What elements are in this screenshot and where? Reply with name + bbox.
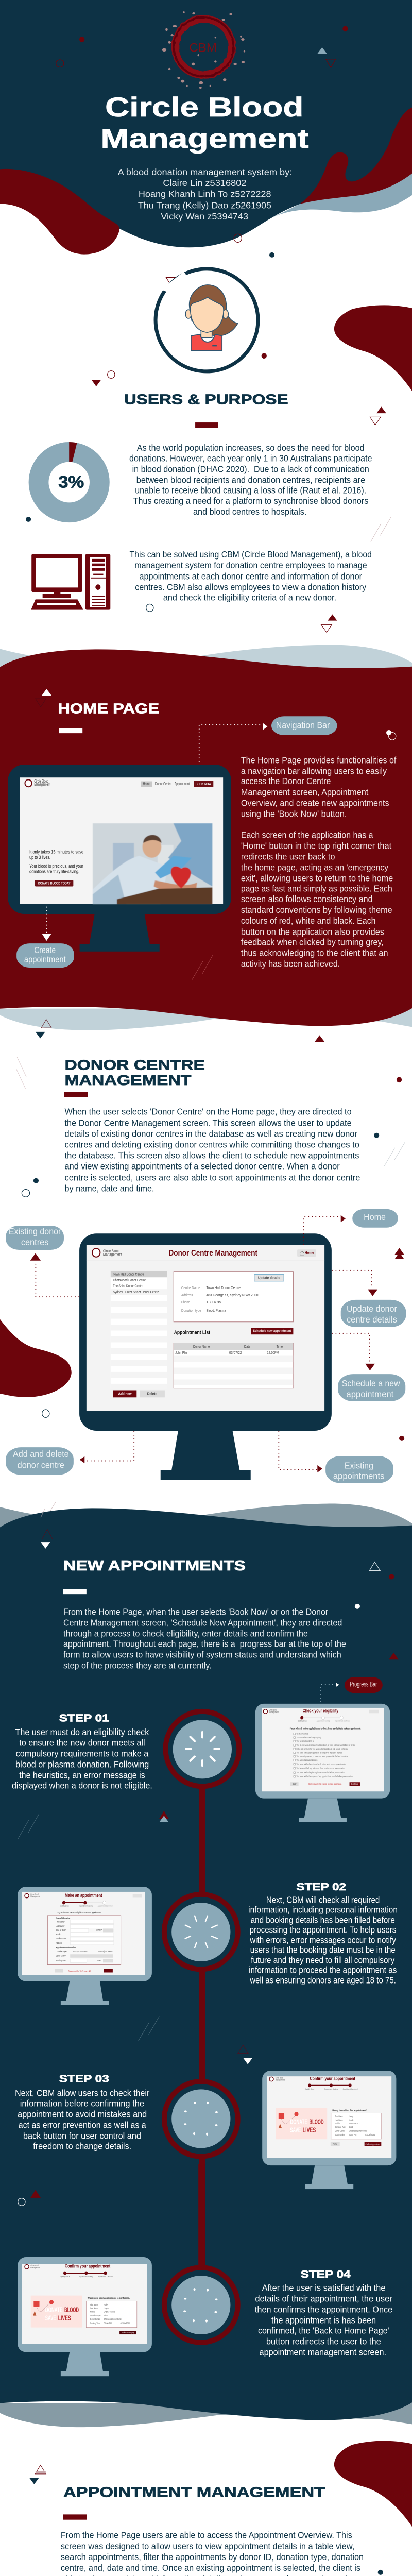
step 01: The user must do an eligibility check bbox=[15, 1727, 149, 1737]
image: donate blood banner: SAVE bbox=[290, 2126, 301, 2134]
callout: create appointment bbox=[16, 907, 74, 968]
details box: Centre Name bbox=[181, 1285, 200, 1290]
step 01: blood or plasma donation. Following bbox=[15, 1759, 149, 1770]
monitor: appointment confirmed: Circle Blood bbox=[30, 2265, 39, 2267]
monitor: check your eligibility: Check your eligibility bbox=[303, 1708, 338, 1714]
callout: home bbox=[304, 1209, 398, 1244]
logo: blood ring: CBM bbox=[189, 41, 217, 55]
details box: 13 14 95 bbox=[207, 1300, 221, 1304]
heading: donor centre management bbox=[65, 1057, 205, 1088]
details box: Update details bbox=[258, 1276, 280, 1280]
text: donor centre description: by name, date and time. bbox=[65, 1183, 154, 1194]
authors: A blood donation management system by: bbox=[118, 167, 292, 177]
callout: progress bar: Progress Bar bbox=[350, 1681, 377, 1688]
details box: 483 George St, Sydney NSW 2000 bbox=[207, 1293, 259, 1297]
monitor: donor centre screen bbox=[0, 1233, 404, 1480]
monitor: confirm your appointment: First Name bbox=[335, 2115, 343, 2118]
step 01: to ensure the new donor meets all bbox=[19, 1738, 145, 1748]
monitor: make an appointment: Donation Type* bbox=[56, 1951, 67, 1953]
monitor: confirm your appointment: Mobile bbox=[335, 2123, 340, 2125]
monitor: home page screen: Management bbox=[34, 782, 50, 787]
callout: navigation bar bbox=[199, 716, 337, 776]
monitor: appointment confirmed: Thank you! Your appointment is confirmed. bbox=[88, 2297, 130, 2300]
monitor: appointment confirmed: Donation Type bbox=[90, 2314, 100, 2317]
text: home page description bbox=[241, 755, 396, 969]
image: donate blood banner: DONATE bbox=[290, 2117, 307, 2126]
callout: add and delete donor centre bbox=[6, 1432, 134, 1475]
appointment table: 03/07/22 bbox=[229, 1351, 242, 1355]
timeline node: step 03 bbox=[164, 2081, 238, 2157]
text: need for donation: and blood centres to hospitals. bbox=[193, 507, 306, 517]
authors bbox=[118, 167, 292, 222]
monitor: home page screen: Donor Centre bbox=[155, 782, 171, 787]
panel: header bbox=[0, 0, 412, 285]
monitor: check your eligibility: Clear bbox=[293, 1783, 297, 1786]
timeline node: step 04 bbox=[164, 2164, 238, 2343]
monitor: check your eligibility: Management bbox=[269, 1711, 279, 1714]
monitor: confirm your appointment: Circle Blood bbox=[276, 2077, 283, 2079]
callout: existing appointments bbox=[279, 1432, 393, 1483]
icon: user portrait bbox=[156, 269, 258, 371]
monitor: home page screen: Appointment bbox=[175, 782, 190, 787]
monitor: make an appointment: Mobile * bbox=[56, 1933, 62, 1936]
monitor: check your eligibility: Continue bbox=[351, 1783, 358, 1786]
text: CBM solution: and check the eligibility criteria of a new donor. bbox=[163, 592, 336, 603]
image: donate blood banner: BLOOD bbox=[64, 2306, 79, 2314]
monitor: check your eligibility bbox=[255, 1704, 390, 1822]
monitor: donor centre screen: Management bbox=[103, 1252, 122, 1257]
step 03: freedom to change details. bbox=[33, 2141, 131, 2151]
monitor: confirm your appointment: 02/08/2022 bbox=[365, 2134, 375, 2137]
monitor: make an appointment: Plasma (1.5 hours) bbox=[98, 1951, 112, 1953]
text: donor centre description bbox=[65, 1107, 360, 1194]
monitor: appointment confirmed: Appointment Confirmed bbox=[98, 2275, 113, 2278]
step 04 bbox=[255, 2268, 392, 2358]
decorations bbox=[26, 353, 391, 612]
callout: update donor centre details bbox=[332, 1270, 406, 1327]
monitor: appointment confirmed: Management bbox=[30, 2266, 40, 2269]
monitor: appointment confirmed: 0456348242 bbox=[104, 2311, 115, 2313]
logo: blood ring bbox=[162, 11, 245, 89]
title: Management bbox=[100, 124, 308, 154]
step 03: appointment to avoid mistakes and bbox=[18, 2109, 147, 2120]
monitor: check your eligibility: Circle Blood bbox=[269, 1709, 277, 1711]
monitor: home page screen: Home bbox=[143, 782, 150, 787]
image: donate blood banner: LIVES bbox=[58, 2314, 71, 2323]
monitor: confirm your appointment: Last Name bbox=[335, 2119, 343, 2122]
monitor: appointment confirmed: Blood bbox=[104, 2314, 108, 2317]
panel: appointment management bbox=[22, 2441, 412, 2576]
authors: Thu Trang (Kelly) Dao z5261905 bbox=[138, 200, 271, 211]
callout: existing donor centres: Existing donor bbox=[9, 1227, 61, 1236]
appointment table: Date bbox=[244, 1345, 251, 1349]
monitor: appointment confirmed: Booking Time bbox=[90, 2322, 100, 2325]
text: CBM solution bbox=[130, 550, 372, 603]
monitor: home page screen: DONATE BLOOD TODAY bbox=[38, 880, 71, 885]
monitor: confirm your appointment: 0456348242 bbox=[349, 2123, 359, 2125]
step 01: compulsory requirements to make a bbox=[16, 1749, 148, 1759]
monitor: donor centre screen: Delete bbox=[147, 1392, 157, 1396]
chart: 3 percent donut: 3% bbox=[58, 473, 84, 492]
authors: Hoang Khanh Linh To z5272228 bbox=[139, 189, 271, 199]
monitor: appointment confirmed: First Name bbox=[90, 2303, 98, 2306]
monitor: check your eligibility: You weigh at least 50 kg bbox=[297, 1740, 314, 1743]
monitor: check your eligibility: You have not had an operation or surgery in the last 6 months bbox=[297, 1752, 342, 1754]
callout: create appointment: appointment bbox=[24, 955, 66, 964]
monitor: donor centre screen: Schedule new appointment bbox=[253, 1329, 291, 1333]
list of donor centres: Sydney Hunter Street Donor Centre bbox=[113, 1290, 159, 1294]
details box: Town Hall Donor Centre bbox=[207, 1285, 241, 1290]
monitor: make an appointment: Time* bbox=[97, 1960, 101, 1962]
callout: navigation bar: Navigation Bar bbox=[276, 720, 330, 731]
monitor: appointment confirmed: Last Name bbox=[90, 2307, 98, 2310]
monitor: donor centre screen: Circle Blood bbox=[103, 1249, 119, 1253]
monitor: make an appointment: Address bbox=[56, 1942, 62, 1945]
callout: existing appointments: appointments bbox=[333, 1471, 384, 1481]
monitor: make an appointment: Donor Centre* bbox=[56, 1955, 66, 1957]
monitor: confirm your appointment: Booking Time bbox=[335, 2134, 345, 2137]
appointment table: Time bbox=[277, 1345, 283, 1349]
callout: add and delete donor centre: Add and delete bbox=[13, 1449, 69, 1459]
monitor: confirm your appointment: Donation Type bbox=[335, 2126, 346, 2129]
image: donate blood banner: BLOOD bbox=[310, 2117, 324, 2126]
monitor: confirm your appointment: Blood bbox=[349, 2126, 353, 2129]
monitor: make an appointment bbox=[18, 1887, 152, 2005]
image: donor photo bbox=[93, 823, 212, 904]
heading: donor centre management: DONOR CENTRE bbox=[65, 1057, 205, 1073]
appointment table: 12:00PM bbox=[267, 1351, 279, 1355]
monitor: appointment confirmed: Confirm your appointment bbox=[65, 2264, 111, 2269]
monitor: home page screen: donations are truly life-saving. bbox=[29, 869, 79, 874]
panel: home page bbox=[0, 645, 412, 1030]
monitor: check your eligibility: In the last 12 months, you have not engaged in at-risk sexual behaviour bbox=[297, 1748, 348, 1751]
monitor: home page screen: It only takes 15 minutes to save bbox=[29, 850, 83, 855]
monitor: make an appointment: Gender* bbox=[96, 1929, 102, 1931]
panel: new appointments background bbox=[0, 1502, 412, 2427]
monitor: make an appointment: Personal Information bbox=[56, 1917, 70, 1920]
list of donor centres bbox=[111, 1271, 167, 1388]
monitor: make an appointment: Date of Birth* bbox=[56, 1929, 66, 1932]
monitor: confirm your appointment: Eligibility Check bbox=[305, 2088, 315, 2090]
monitor: home page screen bbox=[8, 765, 231, 952]
monitor: check your eligibility: You are 18-75 years old bbox=[297, 1733, 308, 1735]
panel: donor centre management bbox=[16, 1020, 405, 1197]
decorations bbox=[56, 26, 348, 285]
monitor: check your eligibility: You are not taking antibiotics bbox=[297, 1759, 317, 1762]
icon: desktop computer bbox=[31, 554, 110, 610]
monitor: check your eligibility: Appointment Booking bbox=[317, 1720, 330, 1722]
details box: Donation type bbox=[181, 1308, 201, 1313]
monitor: check your eligibility: You do not have a serious heart condition, or have not had heart attack or stroke bbox=[297, 1744, 355, 1747]
monitor: confirm your appointment: Appointment Confirmed bbox=[343, 2088, 358, 2090]
authors: Vicky Wan z5394743 bbox=[161, 212, 248, 222]
panel: step 02 and 03 bbox=[15, 1881, 398, 2189]
step 01: STEP 01 bbox=[59, 1713, 109, 1724]
title: Circle Blood bbox=[105, 92, 303, 123]
heading: home page: HOME PAGE bbox=[58, 700, 159, 716]
details box: Blood, Plasma bbox=[207, 1308, 226, 1313]
timeline bbox=[165, 1711, 239, 2267]
step 03 bbox=[15, 2073, 149, 2151]
text: appointment overview description bbox=[61, 2530, 365, 2576]
monitor: appointment confirmed: 02/08/2022 bbox=[121, 2322, 130, 2325]
text: home page description: using the 'Book Now' button. bbox=[241, 809, 347, 819]
callout: create appointment: Create bbox=[34, 945, 56, 955]
monitor: check your eligibility: You have not had any tattoos in the 4 months before your donation bbox=[297, 1767, 345, 1770]
text: home page description: access the Donor Centre bbox=[241, 776, 331, 786]
monitor: make an appointment: Donor must be 18-75 years old bbox=[68, 1970, 91, 1973]
monitor: check your eligibility: You have not had a piercing in the 4 months before your donation bbox=[297, 1772, 345, 1774]
text: new appointments intro bbox=[63, 1607, 346, 1671]
appointment table: John Phe bbox=[175, 1351, 187, 1355]
heading: users and purpose: USERS & PURPOSE bbox=[124, 391, 288, 407]
monitor: confirm your appointment: Confirm Appointment bbox=[366, 2143, 381, 2146]
monitor: make an appointment: Appointment Booking bbox=[79, 1905, 93, 1907]
image: donate blood banner: DONATE bbox=[45, 2306, 62, 2314]
text: need for donation bbox=[129, 443, 372, 517]
screen title: Donor Centre Management bbox=[169, 1249, 258, 1258]
monitor: make an appointment: Last Name* bbox=[56, 1925, 65, 1928]
monitor: check your eligibility: Appointment Confirmed bbox=[335, 1720, 350, 1722]
monitor: appointment confirmed: Haley bbox=[104, 2303, 108, 2306]
monitor: home page screen: up to 3 lives. bbox=[29, 855, 50, 860]
heading: donor centre management: MANAGEMENT bbox=[65, 1072, 191, 1088]
timeline node: step 02 bbox=[164, 1894, 238, 1969]
step 02: STEP 02 bbox=[297, 1881, 346, 1892]
image: donate blood banner bbox=[31, 2296, 82, 2328]
chart: 3 percent donut bbox=[29, 442, 110, 522]
callout: add and delete donor centre: donor centre bbox=[18, 1460, 64, 1470]
monitor: appointment confirmed: Huynh bbox=[104, 2307, 109, 2310]
step 03: information before confirming the bbox=[20, 2098, 144, 2109]
image: donate blood banner: LIVES bbox=[303, 2126, 316, 2134]
step 03: Next, CBM allow users to check their bbox=[15, 2088, 149, 2098]
authors: Claire Lin z5316802 bbox=[163, 178, 247, 188]
callouts: donor centre annotations bbox=[6, 1209, 406, 1483]
list of donor centres: The Shire Donor Centre bbox=[113, 1284, 143, 1288]
appointment table: Donor Name bbox=[193, 1345, 210, 1349]
details box: Phone bbox=[181, 1300, 190, 1304]
list of donor centres: Chatswood Donor Centre bbox=[113, 1278, 146, 1282]
monitor: make an appointment: Make an appointment bbox=[65, 1893, 102, 1898]
list of donor centres: Town Hall Donor Centre bbox=[113, 1272, 144, 1276]
monitor: make an appointment: Circle Blood bbox=[30, 1893, 39, 1896]
title bbox=[100, 92, 308, 154]
monitor: donor centre screen: Appointment List bbox=[174, 1329, 210, 1335]
panel: new appointments bbox=[12, 1557, 399, 2267]
monitor: appointment confirmed: Chatswood Donor Centre bbox=[104, 2318, 122, 2321]
monitor: check your eligibility: You have not had a surgery of any type in the 4 months before your donation bbox=[297, 1775, 353, 1778]
details box: Address bbox=[181, 1293, 193, 1297]
monitor: home page screen: Your blood is precious, and your bbox=[29, 863, 83, 869]
monitor: confirm your appointment: 01:00 PM bbox=[349, 2134, 357, 2137]
monitor: donor centre screen: Home bbox=[305, 1251, 314, 1255]
text: new appointments intro: step of the process they are at currently. bbox=[63, 1660, 212, 1671]
monitor: confirm your appointment: Management bbox=[276, 2079, 285, 2081]
step 01 bbox=[12, 1713, 152, 1791]
monitor: appointment confirmed: Mobile bbox=[90, 2311, 95, 2313]
monitor: donor centre screen: Add new bbox=[118, 1392, 132, 1396]
monitor: check your eligibility: Eligibility Check bbox=[298, 1720, 307, 1722]
monitor: confirm your appointment: Confirm your appointment bbox=[310, 2076, 355, 2081]
panel: users and purpose bbox=[26, 269, 412, 633]
monitor: make an appointment: Congratulations! You are eligible to make an appointment. bbox=[56, 1912, 102, 1914]
monitor: confirm your appointment: Huynh bbox=[349, 2119, 353, 2122]
monitor: appointment confirmed: Donor Centre bbox=[90, 2318, 100, 2321]
monitor: confirm your appointment: BACK bbox=[333, 2143, 338, 2146]
monitor: make an appointment: Email Address bbox=[56, 1938, 66, 1940]
text: home page description: activity has been achieved. bbox=[241, 959, 340, 969]
monitor: home page screen: BOOK NOW bbox=[196, 782, 211, 786]
step 01: the heuristics, an error message is bbox=[19, 1770, 145, 1781]
heading: new appointments: NEW APPOINTMENTS bbox=[63, 1557, 246, 1573]
monitor: make an appointment: Appointment Information bbox=[56, 1946, 76, 1949]
callout: existing donor centres: centres bbox=[21, 1238, 48, 1247]
step 03: STEP 03 bbox=[59, 2073, 109, 2084]
monitor: appointment confirmed: Back to Home page bbox=[122, 2332, 134, 2334]
text: home page description: redirects the user back to bbox=[241, 852, 335, 862]
monitor: make an appointment: Blood (10 minutes) bbox=[73, 1951, 88, 1953]
panel: step 04 bbox=[18, 2164, 392, 2376]
monitor: appointment confirmed: 01:00 PM bbox=[104, 2322, 112, 2325]
step 03: back button for user control and bbox=[23, 2131, 141, 2141]
monitor: make an appointment: First Name* bbox=[56, 1921, 65, 1923]
step 01: displayed when a donor is not eligible. bbox=[12, 1781, 152, 1791]
monitor: appointment confirmed: Eligibility Check bbox=[60, 2275, 70, 2278]
heading: appointment management: APPOINTMENT MANAGEMENT bbox=[63, 2484, 325, 2500]
monitor: make an appointment: Booking Date* bbox=[56, 1960, 66, 1962]
monitor: make an appointment: Management bbox=[30, 1895, 40, 1898]
monitor: confirm your appointment bbox=[262, 2071, 396, 2189]
monitor: check your eligibility: Sorry, you are not eligible to make a donation bbox=[308, 1783, 341, 1786]
monitor: home page screen: Circle Blood bbox=[34, 779, 48, 784]
monitor: make an appointment: Appointment Confirmed bbox=[98, 1905, 113, 1907]
monitor: appointment confirmed: Appointment Booking bbox=[79, 2275, 93, 2278]
callout: existing appointments: Existing bbox=[345, 1461, 373, 1471]
monitor: check your eligibility: You have not had any dental work in the week before your donation bbox=[297, 1763, 346, 1766]
monitor: confirm your appointment: Appointment Booking bbox=[324, 2088, 338, 2090]
callout: existing donor centres bbox=[6, 1226, 79, 1297]
step 03: act as error prevention as well as a bbox=[19, 2120, 146, 2130]
step 04: STEP 04 bbox=[301, 2268, 351, 2280]
monitor: make an appointment: Eligibility Check bbox=[60, 1905, 69, 1907]
monitor: confirm your appointment: Chatswood Donor Centre bbox=[349, 2130, 367, 2132]
monitor: confirm your appointment: Ready to confirm this appointment? bbox=[332, 2109, 368, 2112]
monitor: check your eligibility: You are not pregnant, or have not been pregnant in the last 9 months bbox=[297, 1755, 348, 1758]
monitor: confirm your appointment: Haley bbox=[349, 2115, 353, 2118]
callout: home: Home bbox=[364, 1212, 386, 1222]
details box bbox=[174, 1272, 293, 1322]
callout: progress bar bbox=[321, 1677, 383, 1705]
monitor: confirm your appointment: Donor Centre bbox=[335, 2130, 345, 2132]
image: donate blood banner bbox=[276, 2108, 327, 2139]
monitor: appointment confirmed bbox=[18, 2257, 152, 2376]
callout: schedule a new appointment bbox=[332, 1333, 405, 1401]
appointment table bbox=[174, 1343, 294, 1388]
monitor: check your eligibility: You have not been unwell in any way lately bbox=[297, 1737, 321, 1739]
step 02 bbox=[248, 1881, 398, 1986]
image: donate blood banner: SAVE bbox=[45, 2314, 56, 2323]
